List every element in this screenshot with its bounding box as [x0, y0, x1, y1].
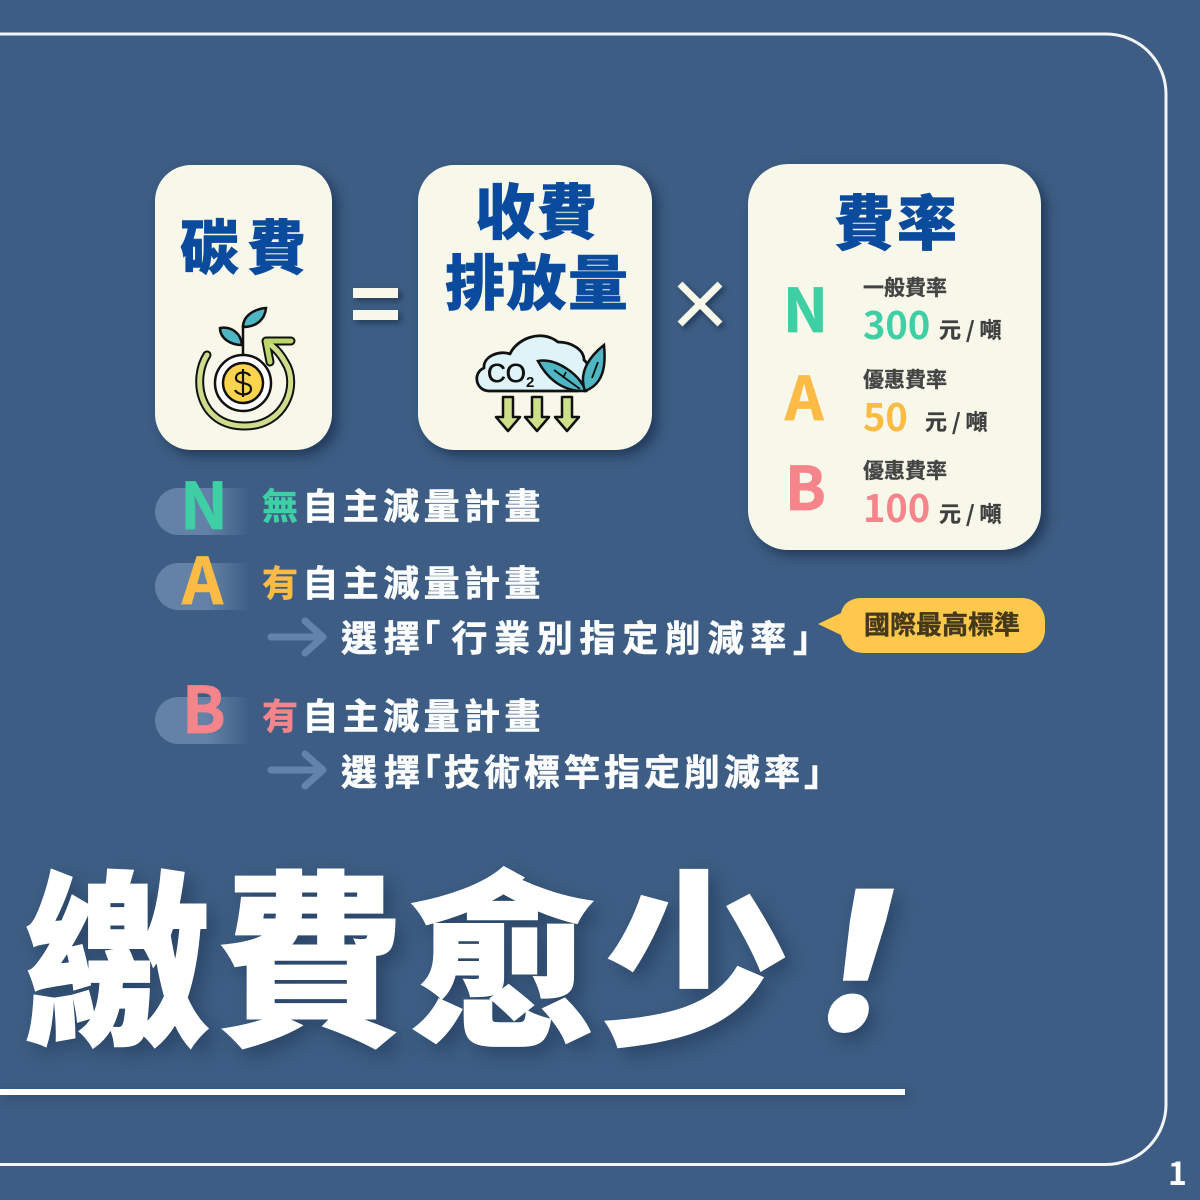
badge N	[155, 456, 241, 548]
rate B value: 100	[863, 478, 930, 533]
icon: coin with sprout and arrow	[195, 306, 296, 430]
text: technology standard designated reduction rate: 選擇 技術標竿指定削減率」	[341, 744, 844, 796]
heading: rates: 費率	[834, 176, 960, 263]
rate A unit: 元 / 噸	[925, 405, 988, 437]
rate N unit: 元 / 噸	[939, 313, 1002, 345]
letter N: N	[180, 456, 228, 548]
panel: rates	[748, 164, 1041, 550]
arrow B	[268, 750, 326, 790]
arrow A	[268, 618, 326, 656]
icon: CO2 cloud with leaves and arrows	[475, 334, 606, 432]
text: has reduction plan A: 有自主減量計畫	[262, 555, 545, 607]
heading: carbon fee: 碳費	[180, 201, 314, 286]
text: industry designated reduction rate: 選擇 行業別指定削減率」	[341, 610, 836, 662]
rate N letter: N	[783, 263, 828, 350]
badge A	[155, 531, 241, 623]
panel: carbon fee	[155, 165, 332, 450]
page number: 1	[1168, 1149, 1187, 1195]
callout: highest international standard	[818, 598, 1045, 653]
heading: emissions: 排放量	[445, 236, 630, 323]
icon: CO2 cloud with leaves and arrows: 2	[526, 374, 534, 391]
callout shape	[818, 598, 1045, 653]
rate N value: 300	[863, 295, 930, 350]
letter A: A	[182, 531, 223, 623]
rate B unit: 元 / 噸	[939, 497, 1002, 529]
pill N	[155, 488, 250, 535]
text: technology standard designated reduction rate: 「	[405, 744, 441, 796]
callout text: 國際最高標準	[864, 605, 1020, 642]
text: no reduction plan: 無自主減量計畫	[262, 478, 545, 530]
rate A letter: A	[785, 351, 823, 438]
main headline: ！	[739, 813, 990, 1085]
icon: CO2 cloud with leaves and arrows: CO	[487, 358, 526, 388]
heading: charged emissions: 收費	[475, 165, 599, 252]
rate B letter: B	[785, 441, 826, 528]
equals sign	[353, 288, 404, 326]
main headline: 繳費愈少	[23, 813, 795, 1085]
headline underline	[0, 1089, 905, 1095]
rate N label: 一般費率	[863, 272, 947, 302]
pill A	[155, 563, 250, 610]
letter B: B	[182, 660, 226, 752]
text: industry designated reduction rate: 「	[404, 610, 440, 662]
rate A value: 50	[863, 387, 908, 442]
badge B	[155, 660, 241, 752]
panel: charged emissions	[418, 165, 652, 450]
multiply sign	[678, 282, 726, 330]
text: has reduction plan B: 有自主減量計畫	[262, 688, 545, 740]
rate B label: 優惠費率	[863, 455, 947, 485]
pill B	[155, 697, 250, 744]
rate A label: 優惠費率	[863, 364, 947, 394]
